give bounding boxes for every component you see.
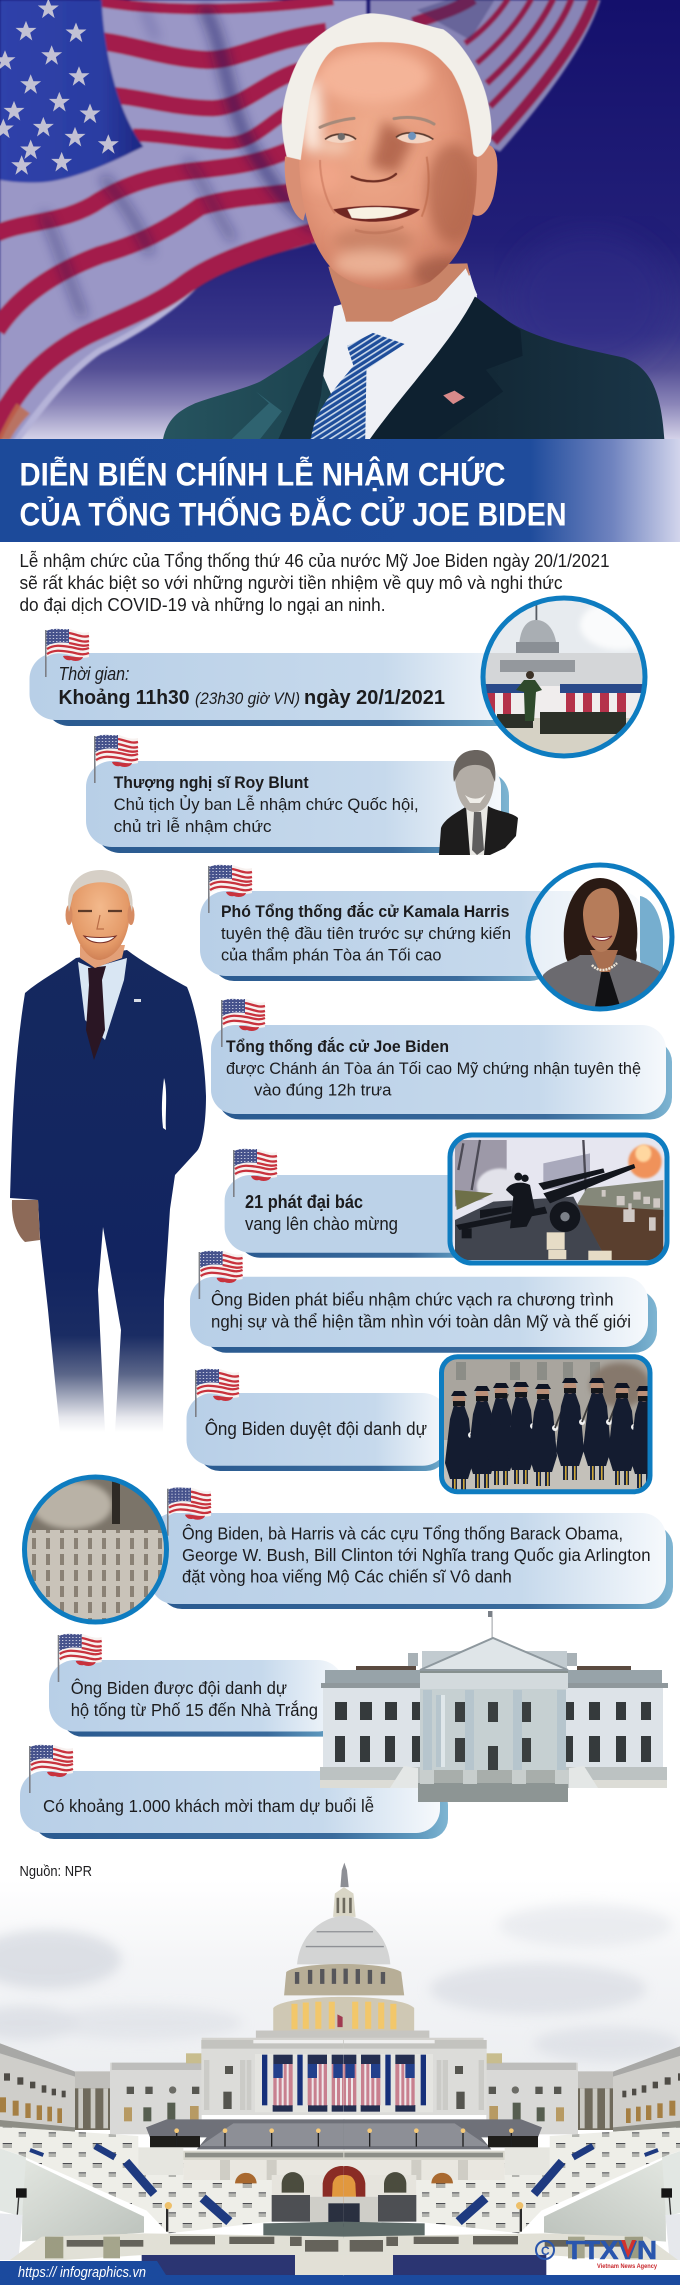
Joe Biden oath text: Tổng thống đắc cử Joe Biden (226, 1037, 449, 1056)
sky clouds (0, 1904, 680, 2061)
Joe Biden oath text: được Chánh án Tòa án Tối cao Mỹ chứng nhận tuyên thệ (226, 1059, 641, 1078)
stands (0, 2127, 272, 2233)
intro text: Lễ nhậm chức của Tổng thống thứ 46 của nước Mỹ Joe Biden ngày 20/1/2021 (20, 550, 610, 571)
right half of building and stands (343, 2040, 680, 2285)
Roy Blunt text: chủ trì lễ nhậm chức (114, 817, 272, 836)
portrait shirt (323, 269, 477, 441)
portrait neck (328, 263, 470, 322)
entablature (420, 1670, 568, 1689)
panel: 21 cannon shots (225, 1135, 667, 1263)
central block (201, 2040, 345, 2115)
Arlington text (182, 1522, 650, 1587)
icon: flag (195, 1369, 239, 1417)
ears (66, 905, 134, 925)
photo: Kamala Harris (528, 865, 672, 1012)
logo: TTXVN: C (541, 2244, 550, 2258)
intro text: sẽ rất khác biệt so với những người tiền nhiệm về quy mô và nghi thức (20, 572, 562, 593)
cannon text: vang lên chào mừng (245, 1214, 398, 1234)
Joe Biden oath text (226, 1037, 641, 1100)
panel: honor guard (186, 1357, 670, 1493)
time value: (23h30 giờ VN) (195, 689, 300, 708)
lapel pin (134, 999, 141, 1002)
photo: Arlington cemetery circle (20, 1475, 170, 1625)
photo: Roy Blunt (439, 750, 518, 855)
bottom bar (0, 2275, 345, 2285)
far wing (0, 2043, 75, 2132)
portico (420, 1686, 566, 1770)
icon: flag (45, 629, 89, 677)
logo: TTXVN: TTXVN (566, 2235, 657, 2265)
portico base (390, 1766, 598, 1802)
neck (80, 945, 125, 968)
portrait collar (393, 268, 477, 321)
Arlington text: George W. Bush, Bill Clinton tới Nghĩa trang Quốc gia Arlington (182, 1545, 650, 1565)
photo: honor guard (442, 1357, 670, 1493)
portrait features (320, 117, 434, 233)
panel: inaugural address (190, 1251, 657, 1353)
portrait ears (285, 145, 497, 221)
cushions (0, 2213, 23, 2260)
hair (68, 870, 133, 912)
icon: flag (94, 735, 138, 783)
title text (20, 456, 566, 532)
inaugural address text (211, 1289, 631, 1331)
columns (423, 1690, 566, 1770)
bunting (142, 2255, 345, 2276)
portrait tie (307, 333, 405, 441)
hero flag (0, 0, 367, 440)
side accent (640, 896, 663, 972)
icon: flag (167, 1488, 211, 1536)
url tag: https:// infographics.vn (18, 2265, 146, 2281)
wings (325, 1670, 662, 1684)
panel: escort (49, 1634, 347, 1737)
icon: flag (29, 1745, 73, 1793)
roof and attic (356, 1651, 631, 1671)
photo: Capitol stage circle (483, 598, 660, 760)
lapel pin (443, 391, 465, 404)
dome (202, 1863, 484, 2059)
escort text (71, 1677, 318, 1720)
time value (58, 687, 445, 709)
icon: flag (233, 1149, 277, 1197)
time value: Khoảng 11h30 (58, 687, 190, 709)
panel: Joe Biden oath (211, 999, 672, 1120)
left half of building and stands (0, 2040, 345, 2285)
speaker and lamp (16, 2188, 172, 2232)
portrait suit (163, 295, 664, 441)
Kamala Harris text: của thẩm phán Tòa án Tối cao (221, 946, 442, 964)
portrait face (299, 35, 477, 290)
panel: time (30, 598, 660, 760)
face features (78, 911, 122, 943)
blue stairs (30, 2146, 229, 2222)
Joe Biden oath text: vào đúng 12h trưa (254, 1080, 392, 1100)
lower facade (183, 2151, 345, 2238)
right background glow (546, 337, 642, 362)
title text: DIỄN BIẾN CHÍNH LỄ NHẬM CHỨC (20, 456, 506, 492)
figure: Joe Biden full body (10, 870, 206, 1432)
retaining wall (138, 2147, 183, 2175)
seating roof (146, 2119, 345, 2149)
time value: ngày 20/1/2021 (304, 687, 445, 709)
photo: Capitol (0, 1863, 680, 2285)
flag pole (488, 1611, 493, 1639)
panel: Arlington (20, 1475, 673, 1625)
upper right flag stripes (370, 0, 601, 152)
source: Nguồn: NPR (20, 1864, 92, 1880)
icon: flag (58, 1634, 102, 1682)
inaugural address text: nghị sự và thể hiện tầm nhìn với toàn dân Mỹ và thế giới (211, 1311, 631, 1331)
sloped walls (0, 2148, 144, 2242)
title text: CỦA TỔNG THỐNG ĐẮC CỬ JOE BIDEN (20, 496, 566, 532)
shirt (78, 958, 127, 1040)
colonnade (75, 2072, 110, 2130)
cannon text (245, 1192, 398, 1234)
time label: Thời gian: (58, 664, 130, 684)
honor guard text: Ông Biden duyệt đội danh dự (205, 1418, 427, 1439)
panel: guests (20, 1745, 448, 1839)
Roy Blunt text: Chủ tịch Ủy ban Lễ nhậm chức Quốc hội, (114, 795, 419, 814)
escort text: Ông Biden được đội danh dự (71, 1677, 287, 1698)
logo: TTXVN (536, 2235, 658, 2270)
guests text: Có khoảng 1.000 khách mời tham dự buổi lễ (43, 1795, 374, 1816)
necktie (86, 966, 106, 1060)
portrait lapels (230, 297, 523, 441)
portrait face shading (301, 50, 480, 290)
panel: Kamala Harris (200, 863, 674, 1012)
gap arm torso (162, 1078, 166, 1130)
lower balustrade (10, 2233, 345, 2260)
windows (335, 1702, 651, 1762)
canton stars (0, 0, 119, 175)
head (70, 872, 130, 960)
mid wing (110, 2053, 203, 2134)
intro text: do đại dịch COVID-19 và những lo ngại an ninh. (20, 594, 386, 615)
hero: flag and portrait (0, 0, 680, 441)
icon: flag (221, 999, 265, 1047)
Kamala Harris text: Phó Tổng thống đắc cử Kamala Harris (221, 902, 510, 921)
url tag (0, 2261, 166, 2285)
logo: TTXVN: Vietnam News Agency (597, 2264, 658, 2270)
photo: cannon salute (450, 1135, 667, 1263)
hand (12, 1200, 40, 1242)
title band (0, 439, 680, 542)
flag fold shadows (43, 7, 320, 317)
pediment (420, 1638, 568, 1670)
cannon text: 21 phát đại bác (245, 1192, 363, 1212)
Kamala Harris text: tuyên thệ đầu tiên trước sự chứng kiến (221, 924, 511, 943)
icon: flag (208, 865, 252, 913)
Roy Blunt text (114, 773, 419, 836)
white circle fill (526, 863, 674, 1011)
Arlington text: đặt vòng hoa viếng Mộ Các chiến sĩ Vô danh (182, 1567, 512, 1587)
escort text: hộ tống từ Phố 15 đến Nhà Trắng (71, 1699, 318, 1720)
body suit (10, 950, 206, 1432)
Roy Blunt text: Thượng nghị sĩ Roy Blunt (114, 773, 309, 792)
Arlington text: Ông Biden, bà Harris và các cựu Tổng thống Barack Obama, (182, 1522, 623, 1543)
intro text (20, 550, 610, 615)
icon: flag (199, 1251, 243, 1299)
photo: White House (320, 1611, 668, 1802)
inaugural address text: Ông Biden phát biểu nhậm chức vạch ra chương trình (211, 1289, 614, 1310)
portrait hair (282, 13, 492, 160)
Kamala Harris text (221, 902, 511, 964)
panel: Roy Blunt (86, 735, 518, 855)
